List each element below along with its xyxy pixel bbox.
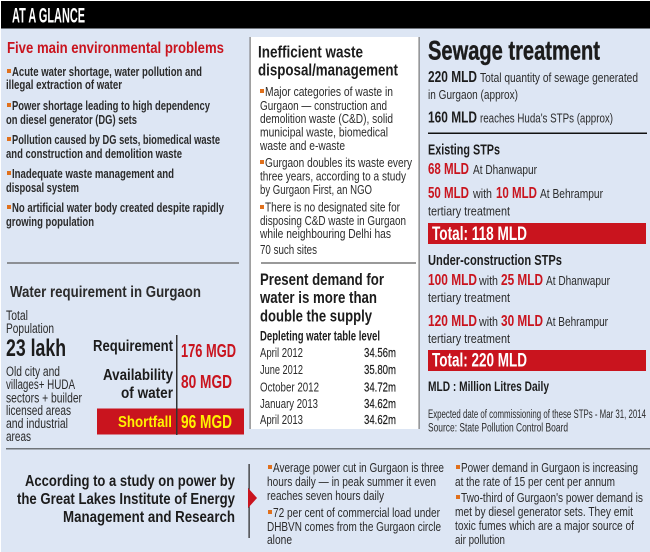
requirement table: [93, 335, 236, 435]
panel: power study: [17, 460, 643, 547]
existing STPs: At Behrampur: [540, 186, 604, 201]
table: depleting water table level: 34.72m: [364, 380, 396, 394]
header bar: at a glance: AT A GLANCE: [12, 4, 85, 28]
table: depleting water table level: 35.80m: [364, 362, 396, 377]
bullet list: problems: disposal system: [6, 180, 79, 195]
requirement table: 176 MGD: [181, 341, 236, 361]
bullet list: waste: There is no designated site for: [265, 200, 401, 214]
bullet list: power column 1: 72 per cent of commercial load under: [273, 505, 441, 520]
existing STPs: 50 MLD: [428, 185, 469, 202]
under-construction STPs: tertiary treatment: [428, 331, 510, 346]
total bar: 220 MLD: Total: 220 MLD: [432, 350, 527, 372]
existing STPs: [428, 142, 604, 218]
table: depleting water table level: Depleting water table level: [260, 328, 380, 344]
under-construction STPs: At Dhanwapur: [546, 273, 611, 288]
total bar: 118 MLD: Total: 118 MLD: [432, 224, 527, 245]
under-construction STPs: 25 MLD: [501, 272, 543, 289]
under-construction STPs: 120 MLD: [428, 313, 477, 330]
bullet list: problems: [6, 64, 225, 229]
under-construction STPs: 30 MLD: [501, 313, 543, 330]
table: depleting water table level: April 2012: [260, 345, 303, 360]
bullet list: power column 2: air pollution: [455, 532, 505, 547]
source note: Source: State Pollution Control Board: [428, 422, 568, 434]
population text block: areas: [6, 429, 31, 444]
bullet list: problems: Pollution caused by DG sets, biomedical waste: [12, 132, 220, 147]
header bar: at a glance: [1, 1, 650, 28]
bullet list: problems: growing population: [6, 214, 94, 229]
bullet list: power column 1: [267, 460, 444, 547]
heading: present demand: double the supply: [260, 306, 372, 326]
heading: inefficient waste: Inefficient waste: [258, 42, 363, 62]
bullet list: problems: Inadequate waste management and: [12, 166, 174, 181]
existing STPs: tertiary treatment: [428, 204, 510, 218]
arrow: [248, 488, 257, 508]
requirement table: Requirement: [93, 338, 174, 355]
bullet list: power column 1: DHBVN comes from the Gurgaon circle: [267, 519, 441, 534]
heading: water requirement: Water requirement in Gurgaon: [10, 284, 201, 301]
bullet list: problems: on diesel generator (DG) sets: [6, 112, 137, 127]
requirement table: Availability: [103, 367, 173, 384]
total bar: 118 MLD: [428, 223, 646, 245]
bullet list: waste: by Gurgaon First, an NGO: [260, 182, 372, 197]
bullet list: problems: and construction and demolition waste: [6, 146, 182, 161]
bullet list: problems: Power shortage leading to high dependency: [12, 98, 211, 113]
requirement table: 80 MGD: [181, 372, 232, 392]
bullet list: waste: [259, 84, 412, 257]
bullet list: problems: illegal extraction of water: [6, 77, 122, 92]
table: depleting water table level: 34.62m: [364, 396, 396, 411]
bullet list: waste: three years, according to a study: [260, 168, 406, 184]
population text block: [6, 308, 82, 444]
panel: inefficient waste disposal: [250, 37, 420, 429]
requirement table: 96 MGD: [181, 412, 232, 432]
population text block: licensed areas: [6, 403, 71, 418]
bullet list: waste: Gurgaon — construction and: [260, 98, 387, 113]
heading: power study: According to a study on power by: [25, 473, 235, 490]
heading: power study: the Great Lakes Institute of Energy: [17, 491, 235, 508]
total bar: 220 MLD: [428, 350, 646, 372]
bullet list: waste: waste and e-waste: [259, 138, 345, 153]
under-construction STPs: 100 MLD: [428, 272, 477, 289]
bullet list: waste: Major categories of waste in: [265, 84, 393, 99]
sewage quantities: in Gurgaon (approx): [428, 87, 518, 102]
existing STPs: At Dhanwapur: [473, 162, 538, 177]
population text block: and industrial: [6, 416, 68, 431]
table: depleting water table level: 34.62m: [364, 412, 396, 427]
under-construction STPs: tertiary treatment: [428, 290, 510, 305]
source note: [428, 409, 646, 434]
bullet list: problems: No artificial water body created despite rapidly: [12, 200, 225, 215]
bullet list: waste: while neighbouring Delhi has: [259, 226, 391, 241]
bullet list: power column 2: [455, 460, 643, 547]
bullet list: power column 1: alone: [267, 532, 292, 547]
existing STPs: Existing STPs: [428, 142, 500, 158]
population text block: Total: [6, 308, 28, 323]
population text block: Old city and: [6, 364, 60, 379]
table: depleting water table level: October 2012: [260, 380, 319, 394]
population text block: villages+ HUDA: [6, 377, 75, 392]
table: depleting water table level: April 2013: [260, 412, 303, 427]
panel: water requirement in Gurgaon: [6, 284, 244, 444]
under-construction STPs: with: [478, 314, 498, 329]
bullet list: waste: disposing C&D waste in Gurgaon: [260, 213, 406, 228]
table: depleting water table level: January 2013: [260, 396, 318, 411]
bullet list: power column 1: Average power cut in Gurgaon is three: [273, 460, 444, 475]
under-construction STPs: with: [478, 273, 498, 288]
sewage quantities: [428, 69, 638, 126]
heading: power study: [17, 473, 235, 526]
population text block: Population: [6, 321, 54, 336]
heading: five main problems: Five main environmental problems: [7, 40, 224, 57]
existing STPs: 68 MLD: [428, 161, 469, 178]
heading: present demand: water is more than: [259, 288, 377, 307]
under-construction STPs: At Behrampur: [546, 314, 609, 329]
table: depleting water table level: June 2012: [260, 362, 303, 377]
panel: inefficient waste disposal: disposal/management: [258, 60, 398, 80]
requirement table: Shortfall: [118, 414, 172, 431]
bullet list: power column 1: hours daily — in peak summer it even: [267, 474, 436, 489]
note: MLD definition: MLD : Million Litres Daily: [428, 379, 549, 394]
bullet list: power column 1: reaches seven hours daily: [267, 488, 384, 503]
requirement table: of water: [121, 385, 173, 402]
existing STPs: 10 MLD: [496, 185, 537, 202]
sewage quantities: 160 MLD: [428, 110, 477, 126]
panel: five main environmental problems: [6, 40, 225, 229]
bullet list: problems: Acute water shortage, water pollution and: [12, 64, 202, 79]
bullet list: waste: demolition waste (C&D), solid: [260, 111, 393, 126]
heading: power study: Management and Research: [63, 509, 235, 526]
population text block: 23 lakh: [6, 335, 66, 362]
under-construction STPs: [428, 252, 611, 346]
bullet list: waste: Gurgaon doubles its waste every: [265, 155, 412, 170]
bullet list: waste: 70 such sites: [260, 242, 317, 257]
table: depleting water table level: [260, 328, 396, 427]
panel: sewage treatment: [428, 36, 647, 434]
heading: present demand: [259, 270, 384, 326]
sewage quantities: 220 MLD: [428, 69, 477, 86]
existing STPs: with: [472, 186, 492, 201]
shortfall highlight bar: [97, 408, 244, 434]
population text block: sectors + builder: [6, 390, 82, 406]
table: depleting water table level: 34.56m: [364, 345, 396, 360]
heading: present demand: Present demand for: [260, 270, 384, 289]
bullet list: waste: municipal waste, biomedical: [260, 124, 388, 140]
under-construction STPs: Under-construction STPs: [428, 252, 562, 269]
